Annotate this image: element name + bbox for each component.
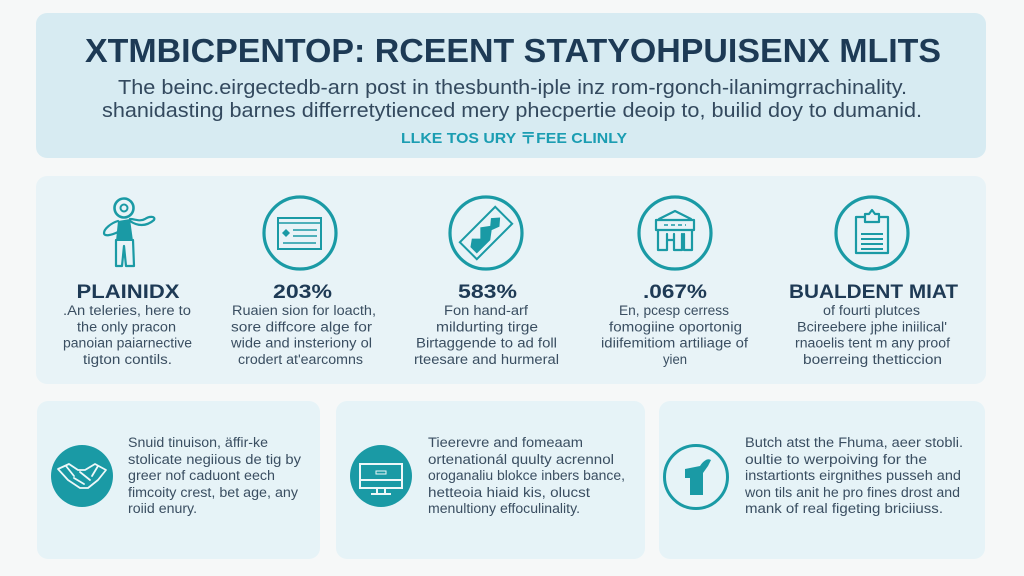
- description: the only pracon: [77, 320, 176, 334]
- description: wide and insteriony ol: [230, 336, 372, 350]
- panel: statistics: [36, 176, 986, 384]
- note text: [128, 435, 301, 516]
- subtitle text: shanidasting barnes differretytienced mery phecpertie deoip to, builid doy to dumanid.: [102, 100, 922, 122]
- description: rnaoelis tent m any proof: [795, 336, 950, 350]
- description: Bcireebere jphe iniilical': [797, 320, 947, 334]
- description: [414, 303, 559, 367]
- icon: handshake: [51, 445, 113, 507]
- description: En, pcesp cerress: [619, 303, 729, 318]
- note text: [744, 435, 963, 516]
- icon: browser window: [264, 197, 336, 269]
- note text: Butch atst the Fhuma, aeer stobli.: [745, 435, 963, 450]
- icon: monitor: [350, 445, 412, 507]
- description: [795, 303, 950, 367]
- note text: hetteoia hiaid kis, olucst: [428, 485, 590, 500]
- description: Fon hand-arf: [444, 303, 528, 318]
- stat column: 203%: [230, 197, 376, 367]
- heading: .067%: [643, 282, 707, 303]
- note text: [428, 435, 625, 516]
- stat column: .067%: [601, 197, 748, 367]
- icon: figure glyph: [664, 446, 728, 508]
- description: [63, 303, 192, 367]
- description: fomogiine oportonig: [609, 320, 742, 334]
- heading: BUALDENT MIAT: [789, 282, 958, 303]
- heading: 583%: [458, 282, 517, 303]
- note text: greer nof caduont eech: [128, 468, 275, 483]
- description: panoian paiarnective: [63, 336, 192, 350]
- subtitle text: [102, 77, 922, 122]
- panel: header: [36, 13, 986, 158]
- note text: ortenationál quulty acrennol: [428, 452, 614, 467]
- description: mildurting tirge: [436, 320, 538, 334]
- note text: fimcoity crest, bet age, any: [128, 485, 298, 500]
- tagline: LLKE TOS URY 〒FEE CLINLY: [401, 130, 627, 147]
- description: Birtaggende to ad foll: [416, 336, 557, 350]
- description: Ruaien sion for loacth,: [232, 303, 376, 318]
- note text: stolicate negiious de tig by: [128, 452, 301, 467]
- description: rteesare and hurmeral: [414, 352, 559, 367]
- note text: oultie to werpoiving for the: [745, 452, 927, 467]
- note text: instartionts eirgnithes pusseh and: [745, 468, 961, 483]
- stat column: Bualdent Miat: [789, 197, 958, 367]
- note text: mank of real figeting briciiuss.: [745, 501, 943, 516]
- description: yien: [663, 352, 687, 367]
- heading: PLAINIDX: [76, 282, 180, 303]
- note text: Tieerevre and fomeaam: [428, 435, 583, 450]
- panel: handshake note: [37, 401, 320, 559]
- note text: roiid enury.: [128, 501, 197, 516]
- icon: clipboard: [836, 197, 908, 269]
- note text: won tils anit he pro fines drost and: [744, 485, 960, 500]
- description: .An teleries, here to: [63, 303, 191, 318]
- description: of fourti plutces: [823, 303, 920, 318]
- description: [230, 303, 376, 367]
- description: sore diffcore alge for: [231, 320, 373, 334]
- icon: pavilion building: [639, 197, 711, 269]
- note text: Snuid tinuison, äffir-ke: [128, 435, 268, 450]
- note text: menultiony effoculinality.: [428, 501, 580, 516]
- description: tigton contils.: [83, 352, 172, 367]
- subtitle text: The beinc.eirgectedb-arn post in thesbunth-iple inz rom-rgonch-ilanimgrrachinality.: [118, 77, 907, 99]
- description: [601, 303, 748, 367]
- title: XTMBICPENTOP: RCEENT STATYOHPUISENX MLITS: [85, 32, 941, 69]
- description: boerreing thetticcion: [803, 352, 942, 367]
- stat column: Plainidx: [63, 198, 192, 367]
- description: idiifemitiom artiliage of: [601, 336, 748, 350]
- description: crodert at'earcomns: [238, 352, 363, 367]
- heading: 203%: [273, 282, 332, 303]
- note text: oroganaliu blokce inbers bance,: [428, 468, 625, 483]
- icon: diagonal ticket: [450, 197, 522, 269]
- panel: figure note: [659, 401, 985, 559]
- stat column: 583%: [414, 197, 559, 367]
- panel: monitor note: [336, 401, 645, 559]
- icon: person: [104, 198, 154, 266]
